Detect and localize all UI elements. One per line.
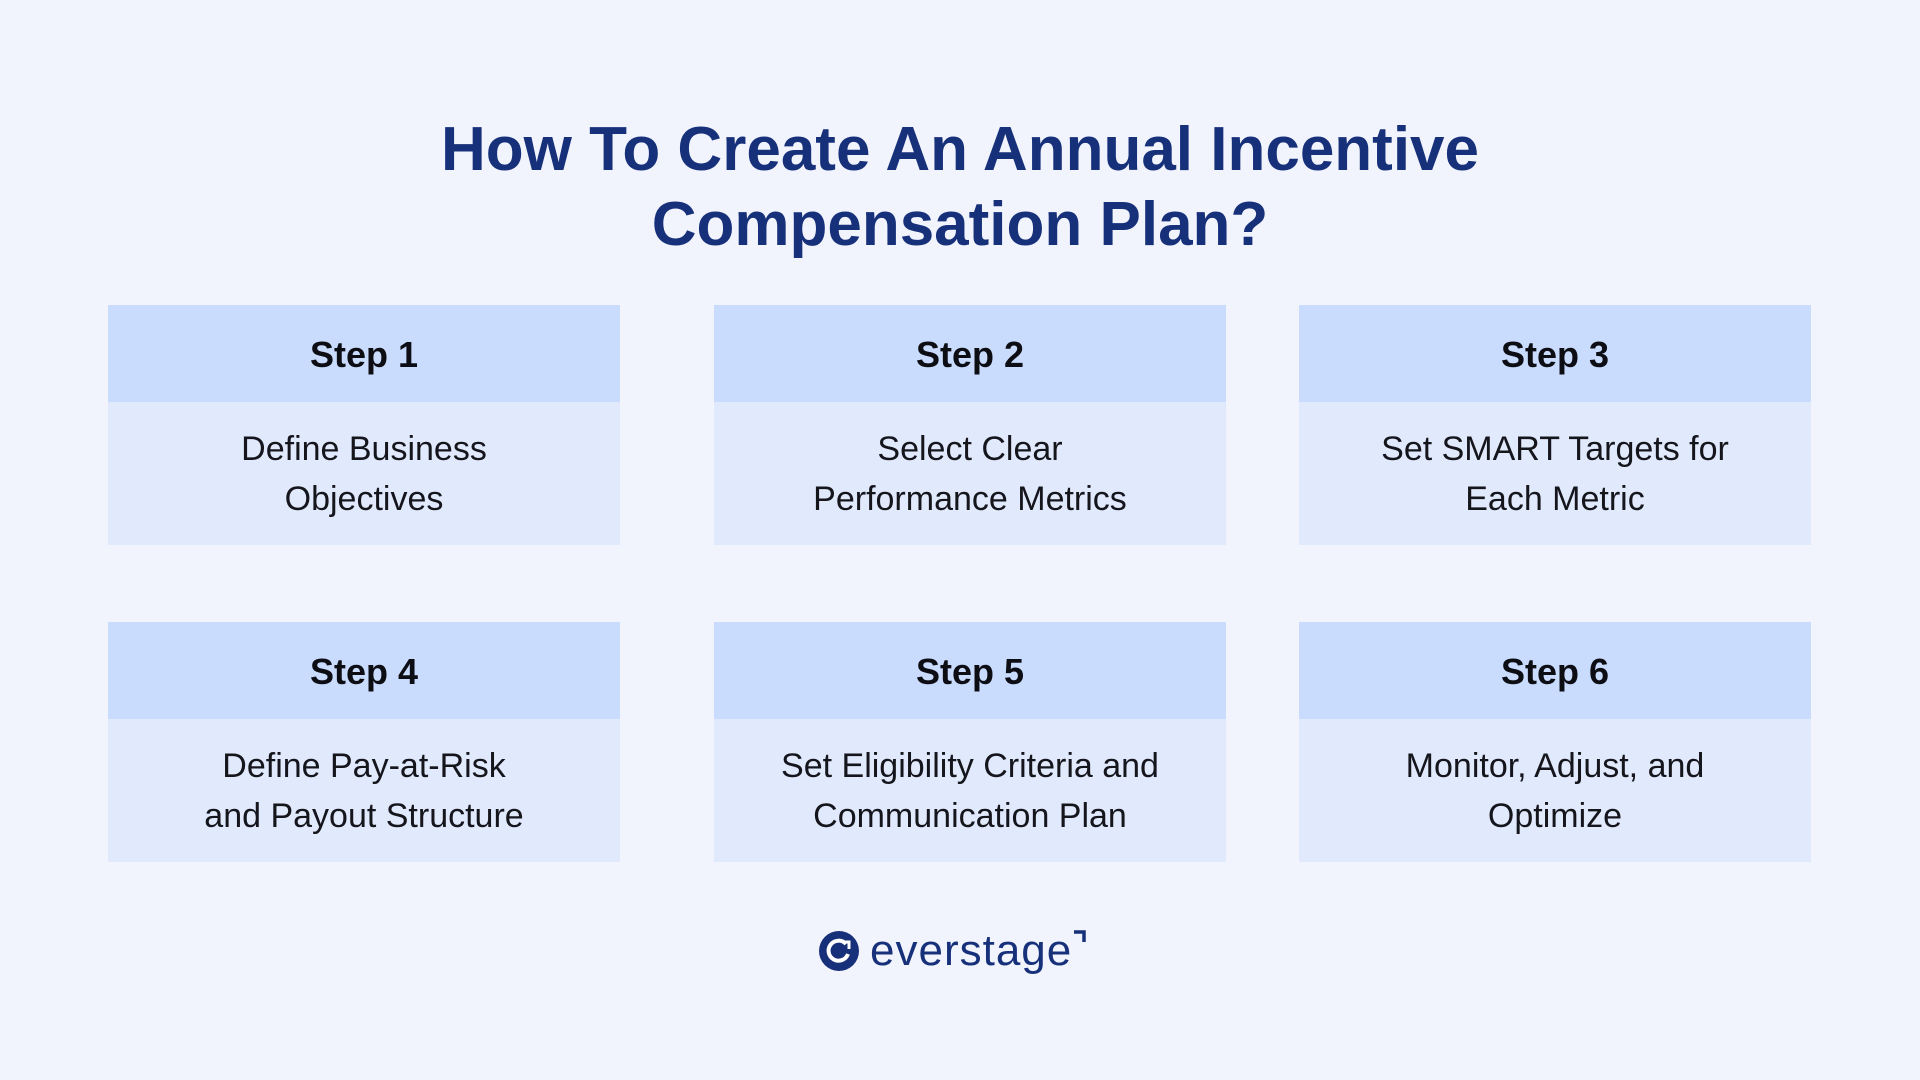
card: step 5: Step 5: [916, 651, 1024, 692]
card: step 6: Optimize: [1488, 796, 1622, 834]
card: step 1: [108, 305, 620, 545]
card: step 1: Step 1: [310, 334, 418, 375]
card: step 5: Communication Plan: [813, 796, 1127, 834]
title: Compensation Plan?: [652, 190, 1268, 259]
card: step 4: Define Pay-at-Risk: [222, 746, 506, 784]
card: step 5: Set Eligibility Criteria and: [781, 746, 1159, 784]
card: step 6: Step 6: [1501, 651, 1609, 692]
card: step 2: [714, 305, 1226, 545]
card: step 5: [714, 622, 1226, 862]
card: step 1: Objectives: [285, 480, 443, 518]
card: step 3: [1299, 305, 1811, 545]
title: [441, 115, 1479, 259]
card: step 4: [108, 622, 620, 862]
card: step 2: Step 2: [916, 334, 1024, 375]
card: step 6: [1299, 622, 1811, 862]
card: step 6: Monitor, Adjust, and: [1406, 746, 1704, 784]
card: step 4: Step 4: [310, 651, 418, 692]
card: step 3: Set SMART Targets for: [1381, 430, 1729, 468]
card: step 4: and Payout Structure: [204, 796, 524, 834]
card: step 2: Performance Metrics: [813, 480, 1127, 518]
logo: everstage: everstage: [870, 926, 1072, 975]
card: step 3: Each Metric: [1465, 480, 1645, 518]
card: step 3: Step 3: [1501, 334, 1609, 375]
card: step 1: Define Business: [241, 430, 487, 468]
icon: logo mark: [819, 931, 859, 971]
card: step 2: Select Clear: [877, 430, 1063, 468]
title: How To Create An Annual Incentive: [441, 115, 1479, 184]
